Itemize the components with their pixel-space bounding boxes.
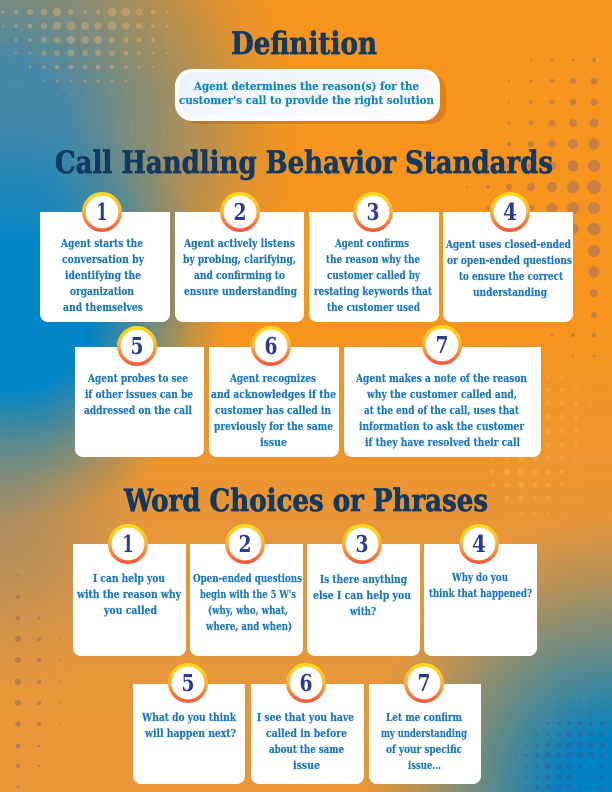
text: phrase 1: [76, 572, 182, 617]
badge 5: 5: [130, 333, 144, 360]
card: phrase 2: [190, 526, 303, 656]
text: standard 3: customer called by: [327, 269, 420, 282]
badge 4: 4: [503, 199, 517, 226]
badge 6: 6: [300, 670, 312, 697]
card: phrase 4: [424, 526, 537, 656]
text: phrase 5: [141, 711, 236, 740]
text: phrase 6: called in before: [266, 727, 347, 740]
text: standard 3: restating keywords that: [314, 285, 433, 298]
text: standard 7: at the end of the call, uses that: [364, 404, 520, 417]
text: phrase 5: What do you think: [141, 711, 236, 724]
badge 7: [424, 327, 460, 363]
text: phrase 7: Let me confirm: [386, 711, 462, 724]
badge 5: 5: [182, 670, 194, 697]
text: standard 6: customer has called in: [215, 404, 331, 417]
text: phrase 6: issue: [293, 759, 320, 772]
panel: definition callout: Agent determines the reason(s) for the: [193, 79, 419, 93]
text: standard 5: Agent probes to see: [87, 372, 188, 385]
heading: Word Choices or Phrases: Word Choices or Phrases: [123, 483, 488, 519]
text: standard 1: and themselves: [63, 301, 143, 314]
badge 6: 6: [264, 333, 278, 360]
panel: definition callout: customer's call to provide the right solution: [179, 93, 435, 107]
badge 3: 3: [366, 199, 380, 226]
text: standard 2: and confirming to: [194, 269, 285, 282]
text: standard 2: ensure understanding: [184, 285, 297, 298]
badge 2: 2: [234, 199, 246, 226]
text: phrase 2: (why, who, what,: [208, 604, 288, 617]
text: standard 7: Agent makes a note of the reason: [355, 372, 527, 385]
text: phrase 3: Is there anything: [320, 573, 407, 586]
text: standard 1: identifying the: [65, 269, 141, 282]
text: phrase 1: you called: [103, 604, 157, 617]
text: standard 2: [183, 237, 297, 298]
card: standard 1: [40, 194, 170, 322]
text: standard 7: if they have resolved their call: [365, 436, 520, 449]
text: standard 2: Agent actively listens: [183, 237, 295, 250]
text: standard 6: [211, 372, 336, 449]
text: standard 6: issue: [260, 436, 287, 449]
text: standard 3: Agent confirms: [334, 237, 409, 250]
text: standard 5: addressed on the call: [84, 404, 192, 417]
badge 4: 4: [472, 531, 486, 558]
text: phrase 4: [429, 571, 532, 600]
text: standard 4: to ensure the correct: [459, 270, 564, 283]
badge 2: 2: [238, 531, 252, 558]
text: phrase 3: [313, 573, 411, 618]
panel: definition callout: [175, 69, 446, 124]
text: phrase 2: where, and when): [205, 620, 292, 633]
text: standard 1: organization: [70, 285, 134, 298]
card: phrase 5: [133, 665, 245, 784]
text: phrase 4: think that happened?: [429, 587, 532, 600]
card: phrase 1: [73, 526, 186, 656]
text: phrase 1: I can help you: [93, 572, 165, 585]
card: phrase 7: [369, 665, 481, 784]
text: standard 4: or open-ended questions: [447, 254, 572, 267]
badge 7: 7: [436, 332, 448, 359]
card: standard 6: [209, 328, 339, 457]
card: phrase 3: [307, 526, 420, 656]
card: standard 3: [309, 194, 439, 322]
text: phrase 2: Open-ended questions: [193, 572, 302, 585]
text: phrase 1: with the reason why: [76, 588, 182, 601]
text: standard 6: and acknowledges if the: [211, 388, 336, 401]
text: phrase 7: my understanding: [381, 727, 467, 740]
text: standard 5: if other issues can be: [85, 388, 193, 401]
text: standard 4: Agent uses closed-ended: [445, 238, 571, 251]
card: standard 7: [344, 327, 541, 457]
title: Definition: Definition: [231, 26, 377, 62]
text: phrase 4: Why do you: [451, 571, 508, 584]
badge 1: 1: [96, 199, 108, 226]
text: standard 3: [314, 237, 433, 314]
text: standard 1: conversation by: [62, 253, 145, 266]
card: phrase 6: [251, 665, 364, 784]
text: standard 2: by probing, clarifying,: [183, 253, 296, 266]
text: phrase 2: begin with the 5 W's: [200, 588, 296, 601]
text: standard 4: understanding: [473, 286, 547, 299]
text: standard 5: [84, 372, 193, 417]
text: standard 4: [445, 238, 572, 299]
text: standard 7: why the customer called and,: [366, 388, 517, 401]
badge 3: 3: [356, 531, 368, 558]
card: standard 4: [443, 194, 573, 322]
text: phrase 3: else I can help you: [313, 589, 411, 602]
text: phrase 7: [381, 711, 467, 772]
text: standard 6: Agent recognizes: [229, 372, 316, 385]
badge 7: 7: [418, 670, 430, 697]
text: standard 3: the customer used: [327, 301, 420, 314]
text: standard 1: Agent starts the: [60, 237, 143, 250]
card: standard 2: [175, 194, 304, 322]
text: standard 3: the reason why the: [326, 253, 420, 266]
badge 1: 1: [122, 531, 134, 558]
text: standard 7: information to ask the customer: [359, 420, 524, 433]
text: phrase 6: about the same: [269, 743, 344, 756]
text: standard 6: previously for the same: [214, 420, 333, 433]
text: phrase 5: will happen next?: [144, 727, 236, 740]
text: standard 1: [60, 237, 145, 314]
text: phrase 3: with?: [349, 605, 376, 618]
text: phrase 6: I see that you have: [257, 711, 354, 724]
text: phrase 6: [257, 711, 354, 772]
text: phrase 7: of your specific: [386, 743, 462, 756]
text: standard 7: [355, 372, 527, 449]
text: phrase 2: [193, 572, 302, 633]
card: standard 5: [75, 328, 204, 457]
text: phrase 7: issue...: [408, 759, 441, 772]
